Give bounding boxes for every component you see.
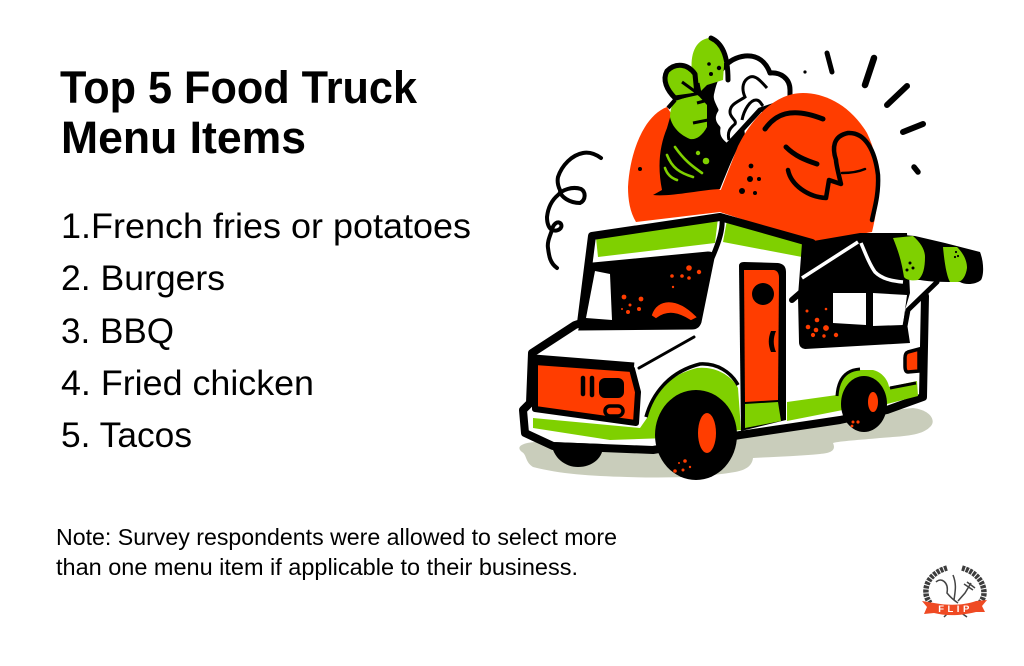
taco face [765,113,878,220]
taco seeds [638,147,761,195]
front wheel [655,390,737,480]
cab roof divider [712,218,722,258]
grille front [534,359,638,423]
green bumper and front wheel arch [533,368,741,440]
awning [880,233,983,284]
lettuce folds [728,77,767,140]
logo wordmark: FLIP [938,604,973,615]
survey note: than one menu item if applicable to their business. [56,554,578,580]
door [739,262,786,431]
roof green band [596,218,806,257]
lettuce [711,56,790,146]
rear light [905,349,919,372]
cutlery [936,575,975,617]
ranked menu list: 5. Tacos [61,416,192,455]
hood crease [639,337,694,368]
title [60,62,418,163]
curly squiggle [547,153,601,268]
awning support arm [905,282,937,326]
side green strip with rear arch [787,370,918,421]
survey note: Note: Survey respondents were allowed to select more [56,524,617,550]
windshield speckles [621,265,701,319]
front under-wheel [551,442,603,467]
ranked menu list: 4. Fried chicken [61,364,314,403]
taco inner shadow [653,60,745,195]
ranked menu list [61,207,471,455]
taco shell back [628,107,760,225]
ranked menu list: 1.French fries or potatoes [61,207,471,246]
survey note [56,524,617,580]
green leaves [665,38,728,139]
cab side window [586,271,612,320]
wheel arch outline [646,364,738,417]
flip logo [922,568,987,617]
title: Top 5 Food Truck [60,62,418,113]
rear wheel [841,376,887,432]
laurel wreath [926,568,984,603]
ranked menu list: 2. Burgers [61,259,225,298]
windshield [580,253,713,329]
rear arch outline [837,369,916,396]
ribbon banner [922,600,987,615]
title: Menu Items [61,112,306,163]
sun rays [803,53,923,172]
truck outline [523,217,925,450]
ranked menu list: 3. BBQ [61,312,174,351]
ground shadow [519,408,933,477]
service window housing [792,233,910,349]
taco shell front hump [720,93,878,242]
illustration: food truck with taco [519,38,983,480]
truck body fill [523,217,925,450]
